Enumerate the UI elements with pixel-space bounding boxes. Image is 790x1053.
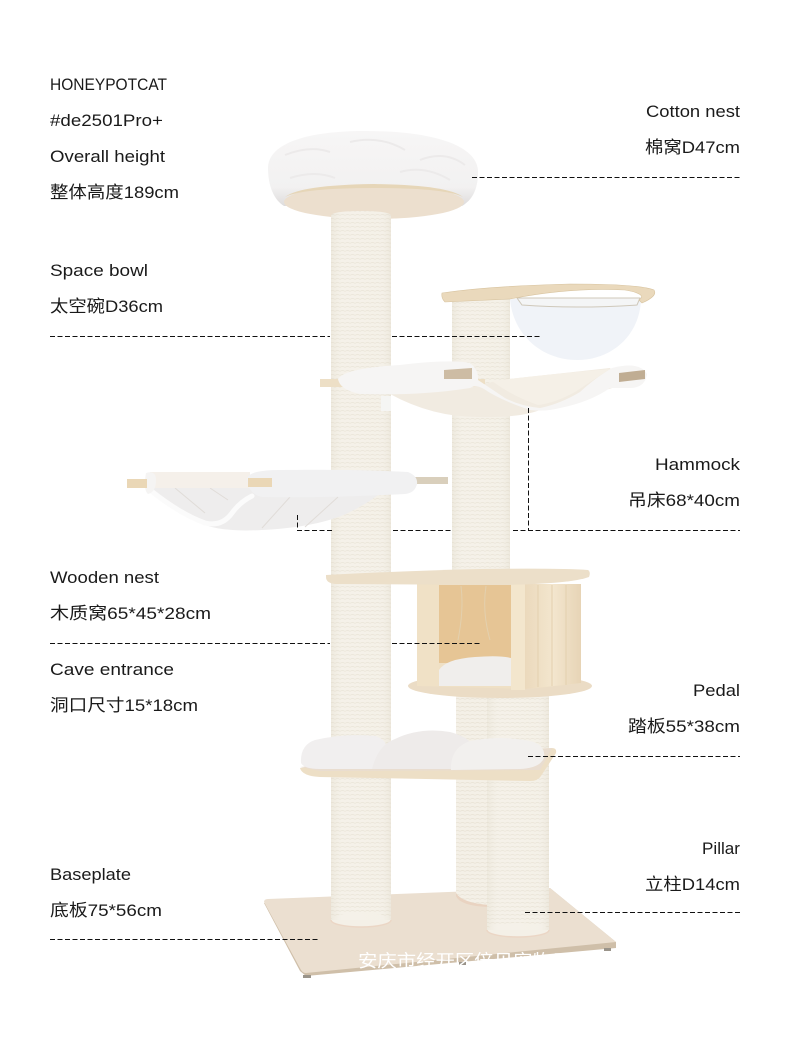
label: baseplate: 底板75*56cm [50,901,162,920]
label: wooden nest: Wooden nest [50,568,159,587]
label: pillar [645,839,740,894]
label: cave entrance [50,660,198,715]
label: space bowl [50,261,163,316]
sleeve slot right [619,370,645,382]
pedal platform [300,731,556,781]
cat tree illustration [127,131,655,978]
label: baseplate [50,865,162,920]
upper middle pillar [452,296,510,572]
front right pillar [487,695,549,937]
hammock fleece edge [338,361,647,411]
sleeve slot [248,478,272,487]
hammock rod [320,379,485,387]
pedal cushion middle [372,731,470,769]
nest front post right [511,584,525,690]
nest base plate [408,674,592,698]
nest grain lines [458,585,566,687]
product info heading [50,75,179,202]
tall left pillar [331,211,391,927]
label: cave entrance: 洞口尺寸15*18cm [50,696,198,715]
sleeve left [145,472,156,494]
label: pedal: 踏板55*38cm [628,717,740,736]
nest top plate [326,569,590,585]
hammock bed [146,480,378,530]
hammock inner bed [492,369,610,405]
product info heading: #de2501Pro+ [50,111,163,130]
nest inner cushion [439,656,511,686]
hammock cream sleeve [150,472,250,488]
leader lines [50,178,740,940]
nest side panel [525,584,581,689]
label: wooden nest: 木质窝65*45*28cm [50,604,211,623]
bowl rim [517,298,640,307]
nest front post left [417,585,439,686]
bowl wooden ring [442,284,655,303]
hammock rod [414,477,448,484]
label: pedal [628,681,740,736]
pedal board [300,748,556,781]
hammock bed [390,368,622,417]
label: cotton nest [645,102,740,157]
product info heading: 整体高度189cm [50,183,179,202]
nest opening [439,585,511,663]
right hammock [320,361,647,417]
label: pillar: 立柱D14cm [645,875,740,894]
pedal cushion right [451,738,544,770]
sleeve slot left [444,368,472,379]
label: cave entrance: Cave entrance [50,660,174,679]
hammock fold lines [175,488,338,528]
clear bowl [510,299,641,360]
baseplate [264,888,616,978]
sleeve slot far [127,479,147,488]
label: baseplate: Baseplate [50,865,131,884]
wooden nest [326,569,592,698]
label: space bowl: Space bowl [50,261,148,280]
top round platform [284,184,464,219]
label: wooden nest [50,568,211,623]
label: pedal: Pedal [693,681,740,700]
left hammock [127,470,448,530]
label: pillar: Pillar [702,839,740,858]
label: space bowl: 太空碗D36cm [50,297,163,316]
watermark text: 安庆市经开区倍贝宠物用品店 [358,951,610,971]
label: cotton nest: Cotton nest [646,102,740,121]
pedal top surface [300,748,552,771]
back pillar [456,695,489,907]
space bowl [442,284,655,360]
product info heading: HONEYPOTCAT [50,75,167,94]
product info heading: Overall height [50,147,165,166]
label: hammock [628,455,741,510]
label: hammock: Hammock [655,455,741,474]
hammock rim [150,490,252,524]
label: cotton nest: 棉窝D47cm [645,138,740,157]
nest body [417,584,581,689]
hammock sleeve [247,470,417,497]
label: hammock: 吊床68*40cm [628,491,740,510]
cotton nest cushion [268,131,478,206]
pedal cushion left [301,735,386,769]
hammock clip [381,396,391,411]
